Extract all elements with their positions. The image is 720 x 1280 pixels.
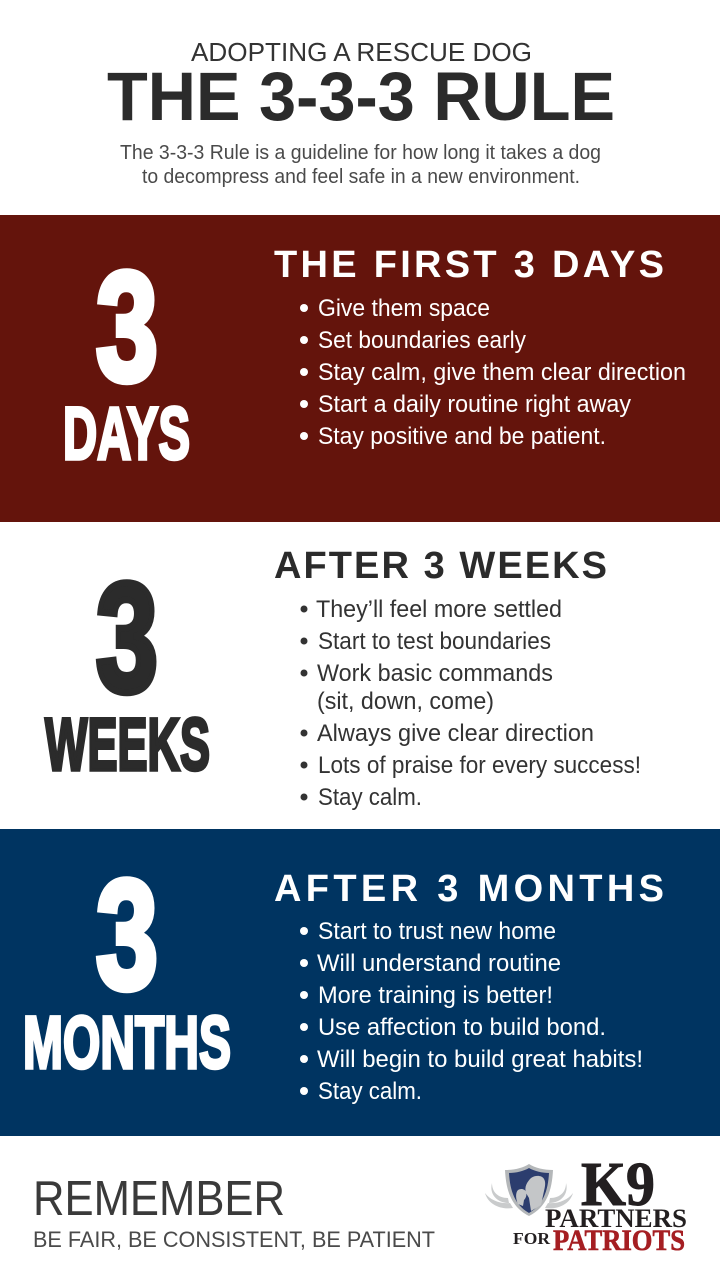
- bullet list: after 3 weeks: [300, 596, 641, 811]
- bullet list: after 3 months: More training is better!: [318, 982, 553, 1009]
- intro text: [120, 142, 601, 188]
- big number: 3 days: DAYS: [63, 392, 190, 475]
- panel: after 3 weeks: [0, 522, 720, 829]
- title: THE 3-3-3 RULE: [107, 58, 615, 135]
- remember tagline: BE FAIR, BE CONSISTENT, BE PATIENT: [33, 1227, 435, 1252]
- logo wordmark: PARTNERS: [545, 1204, 687, 1233]
- big number: 3 months: [23, 848, 231, 1084]
- panel: first 3 days: [0, 215, 720, 522]
- big number: 3 weeks: 3: [96, 551, 158, 724]
- bullet list: after 3 weeks: Always give clear direction: [317, 720, 594, 747]
- bullet list: after 3 months: Will understand routine: [317, 950, 561, 977]
- logo wordmark: [513, 1151, 687, 1257]
- bullet list: first 3 days: Set boundaries early: [318, 327, 526, 354]
- bullet list: after 3 months: Use affection to build bond.: [318, 1014, 606, 1041]
- icon: shield with wings: [485, 1164, 573, 1216]
- big number: 3 weeks: [45, 551, 210, 786]
- heading: the first 3 days: THE FIRST 3 DAYS: [274, 244, 664, 286]
- bullet list: after 3 weeks: (sit, down, come): [317, 688, 494, 715]
- logo wordmark: K9: [581, 1151, 655, 1219]
- bullet list: after 3 weeks: Work basic commands: [317, 660, 553, 687]
- bullet list: after 3 weeks: Stay calm.: [318, 784, 422, 811]
- bullet list: first 3 days: Stay positive and be patient.: [318, 423, 606, 450]
- big number: 3 days: [63, 240, 190, 475]
- panel: after 3 months: [0, 829, 720, 1136]
- logo wordmark: PATRIOTS: [553, 1224, 685, 1257]
- heading: after 3 weeks: AFTER 3 WEEKS: [274, 545, 607, 587]
- big number: 3 days: 3: [96, 240, 158, 413]
- bullet list: first 3 days: [300, 295, 686, 450]
- bullet list: first 3 days: Stay calm, give them clear direction: [318, 359, 686, 386]
- bullet list: after 3 weeks: Lots of praise for every success!: [318, 752, 641, 779]
- bullet list: after 3 months: [300, 918, 643, 1105]
- big number: 3 weeks: WEEKS: [45, 703, 210, 786]
- bullet list: after 3 weeks: They’ll feel more settled: [316, 596, 562, 623]
- remember heading: REMEMBER: [33, 1172, 285, 1226]
- big number: 3 months: MONTHS: [23, 1001, 231, 1084]
- eyebrow heading: ADOPTING A RESCUE DOG: [191, 37, 532, 67]
- bullet list: after 3 months: Stay calm.: [318, 1078, 422, 1105]
- header block: [107, 37, 615, 188]
- heading: after 3 months: AFTER 3 MONTHS: [274, 868, 664, 910]
- intro text: The 3-3-3 Rule is a guideline for how long it takes a dog: [120, 142, 601, 164]
- logo wordmark: FOR: [513, 1229, 551, 1248]
- bullet list: first 3 days: Give them space: [318, 295, 490, 322]
- bullet list: first 3 days: Start a daily routine right away: [318, 391, 631, 418]
- bullet list: after 3 weeks: Start to test boundaries: [318, 628, 551, 655]
- big number: 3 months: 3: [96, 848, 158, 1021]
- logo: K9 Partners for Patriots: [485, 1151, 687, 1257]
- bullet list: after 3 months: Start to trust new home: [318, 918, 556, 945]
- intro text: to decompress and feel safe in a new environment.: [142, 166, 580, 188]
- footer reminder: [33, 1172, 435, 1252]
- bullet list: after 3 months: Will begin to build great habits!: [317, 1046, 643, 1073]
